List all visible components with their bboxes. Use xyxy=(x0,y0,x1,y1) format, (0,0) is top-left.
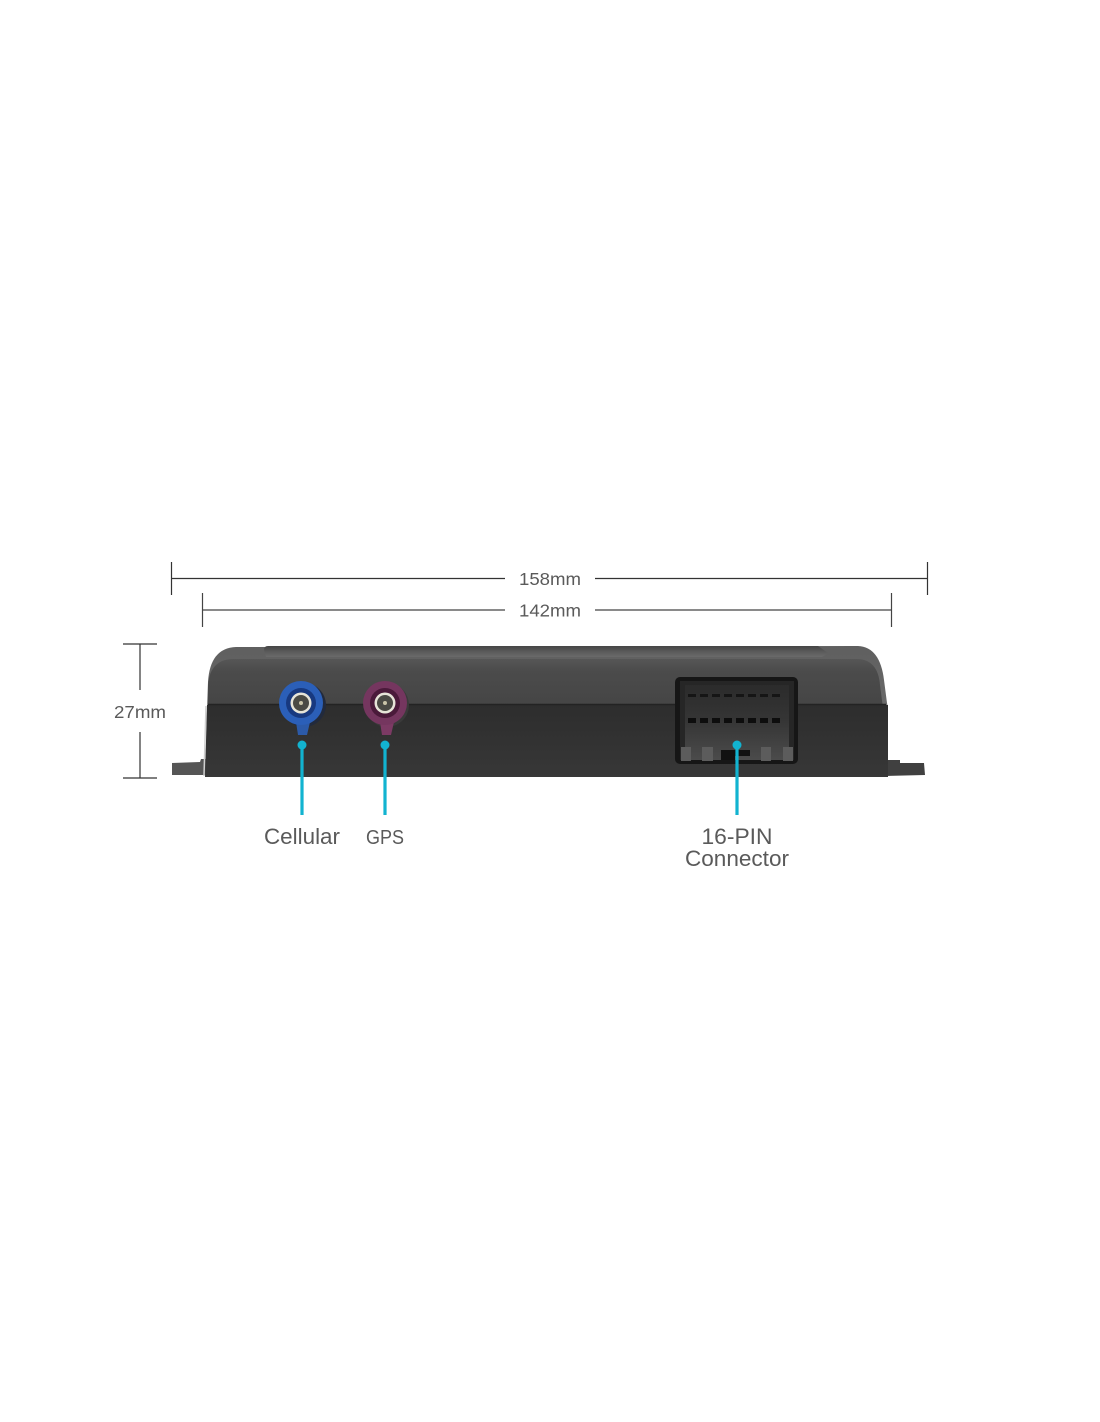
port inner walls xyxy=(680,681,794,760)
dimension: 27mm height xyxy=(114,644,166,778)
port keying tabs xyxy=(681,747,793,761)
label: 16-PIN Connector xyxy=(685,824,789,871)
connector: Cellular xyxy=(279,681,326,735)
label: 16-PIN Connector: Connector xyxy=(685,846,789,871)
label: Cellular: Cellular xyxy=(264,824,340,849)
callout line: 16-pin connector xyxy=(732,740,742,815)
top ridge xyxy=(264,646,828,657)
port centre key xyxy=(721,750,750,760)
callout line: GPS xyxy=(380,740,390,815)
label: 16-PIN Connector: 16-PIN xyxy=(702,824,772,849)
upper housing front face xyxy=(208,659,883,708)
dimension: 142mm mounting width xyxy=(202,593,892,627)
lower housing xyxy=(205,705,888,777)
dimension: 158mm overall width: 158mm xyxy=(519,569,581,589)
label: GPS: GPS xyxy=(366,827,404,849)
callout line: Cellular xyxy=(298,740,306,815)
pins: lower row xyxy=(688,718,780,723)
connector: 16-pin port xyxy=(675,677,798,764)
dimension: 142mm mounting width: 142mm xyxy=(519,600,581,620)
left mounting flange xyxy=(172,759,206,775)
upper housing shell xyxy=(207,646,888,708)
pins: upper row xyxy=(688,694,780,697)
dimension: 158mm overall width xyxy=(172,562,928,595)
device enclosure xyxy=(172,646,925,777)
right mounting flange xyxy=(886,760,925,776)
connector: GPS xyxy=(363,681,409,735)
housing left edge highlight xyxy=(204,706,206,776)
dimension: 27mm height: 27mm xyxy=(114,702,166,722)
housing seam xyxy=(208,704,886,706)
